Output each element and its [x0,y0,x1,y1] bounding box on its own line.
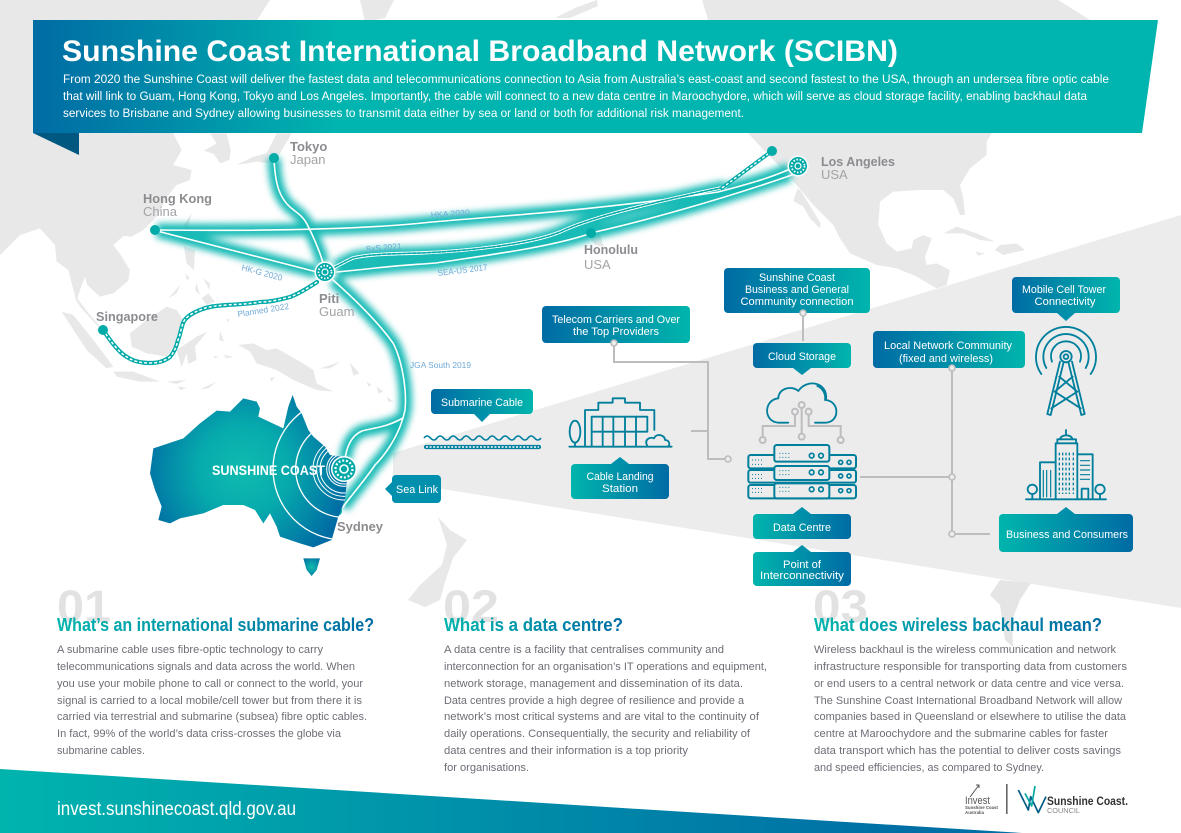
body text: Wireless backhaul is the wireless communication and network [814,644,1116,656]
city labels: USA [821,167,848,182]
banner panel [33,20,1158,133]
cable labels: Planned 2022 [237,301,290,319]
signal arcs [272,412,347,540]
callout: Sea Link [385,475,441,503]
intro paragraph: that will link to Guam, Hong Kong, Tokyo and Los Angeles. Importantly, the cable will connect to a new data centre in Maroochydore, which will serve as cloud storage facility, enabling backhaul data [63,89,1087,103]
callout: Business and Consumers [999,507,1133,552]
icon: submarine cable waves [424,436,541,447]
city labels: Sydney [337,519,384,534]
logo: Sunshine Coast Council: COUNCIL [1047,806,1080,815]
icon: server stack [748,445,856,498]
callout: Point of Interconnectivity [753,545,851,586]
callout: Submarine Cable: Submarine Cable [441,397,523,409]
callout: Mobile Cell Tower: Mobile Cell Tower [1022,284,1106,296]
cable labels: HKA 2020 [430,207,470,220]
number 02: 02 [443,581,499,632]
callout: Cloud Storage: Cloud Storage [768,351,836,363]
title: Sunshine Coast International Broadband Network (SCIBN) [62,35,898,68]
city labels [96,139,895,534]
Asia and islands [0,0,393,402]
cable: planned 2022 [103,282,317,363]
callout: Cable Landing Station [571,457,669,499]
callout: Cable Landing Station: Station [602,483,638,495]
body text: or end users to a central network or data centre and vice versa. [814,678,1124,690]
callout: Business and Consumers: Business and Consumers [1006,529,1128,541]
body text [57,644,367,757]
callout: Point of Interconnectivity: Interconnectivity [760,570,845,582]
number 03: 03 [813,581,868,632]
body text: infrastructure responsible for transporting data from customers [814,661,1127,673]
number 01: 01 [57,581,111,632]
body text: centre at Maroochydore and the submarine cables for faster [814,728,1108,740]
body text: companies based in Queensland or elsewhere to utilise the data [814,711,1127,723]
body text: The Sunshine Coast International Broadband Network will allow [814,695,1123,707]
body text: you use your mobile phone to call or connect to the world, your [57,678,363,690]
hub node: Sunshine Coast [331,456,357,482]
body text: daily operations. Consequentially, the security and reliability of [444,728,751,740]
callout: Point of Interconnectivity: Point of [783,559,822,571]
city labels: Los Angeles [821,154,895,169]
intro paragraph: From 2020 the Sunshine Coast will deliver the fastest data and telecommunications connection to Asia from Australia’s east-coast and second fastest to the USA, through an undersea fibre optic cable [63,72,1109,86]
hub node: Los Angeles [788,156,808,176]
callout: Data Centre: Data Centre [773,522,831,534]
city labels: Honolulu [584,242,638,257]
body text: network storage, management and dissemination of its data. [444,678,743,690]
city labels: Tokyo [290,139,327,154]
body text: carried via terrestrial and submarine (subsea) fibre optic cables. [57,711,367,723]
body text [814,644,1127,774]
circuit connectors [760,402,844,443]
callout: Cable Landing Station: Cable Landing [586,471,654,483]
icon: cell tower [1036,327,1096,415]
city labels: Japan [290,152,325,167]
connector: community to cloud storage [802,314,804,341]
intro paragraph: services to Brisbane and Sydney allowing businesses to transmit data either by sea or land or both for additional risk management. [63,106,744,120]
North America [702,0,1090,288]
icon: cloud [760,383,844,443]
Australia map [150,395,357,576]
cable labels [237,207,488,370]
city labels: China [143,204,178,219]
callout: Sunshine Coast community connection: Sunshine Coast [759,272,835,284]
section 02 [443,581,767,774]
heading: What does wireless backhaul mean? [814,615,1102,635]
header banner [33,20,1158,155]
cable: Sunshine Coast branch [345,418,403,460]
connector: data centre to local network and business [860,370,990,537]
icon: cable landing station [569,398,672,447]
city labels: USA [584,257,611,272]
intro paragraph [63,72,1109,120]
cable: JGA South 2019 [333,280,405,507]
hub node: Guam [314,262,336,282]
footer band [0,769,1022,833]
banner fold [33,133,79,155]
world map background [0,0,1090,607]
body text: data transport which has the potential to deliver costs savings [814,745,1121,757]
callout: Local Network Community [873,331,1025,371]
body text: for organisations. [444,762,529,774]
cable: HK-G 2020 [157,231,317,272]
city labels: Hong Kong [143,191,212,206]
callout: Sunshine Coast community connection [724,268,870,316]
South America tip [990,580,1031,647]
heading: What is a data centre? [444,615,623,635]
callout: Data Centre [753,507,851,539]
cable: HKA 2020 [157,169,790,230]
city labels: Guam [319,304,354,319]
callout: Local Network Community: (fixed and wireless) [899,353,993,365]
connector: telecom carriers to data centre [611,340,731,462]
Tasmania [303,558,320,576]
callout: Sunshine Coast community connection: Business and General [745,284,849,296]
city labels: Singapore [96,309,158,324]
icon: city buildings [1026,430,1106,499]
callout: Local Network Community: Local Network Community [884,340,1012,352]
cable labels: SxS 2021 [365,241,402,254]
cable: SxS 2021 [335,151,772,267]
body text: In fact, 99% of the world’s data criss-crosses the globe via [57,728,342,740]
logo: Invest Sunshine Coast Australia: Australia [965,810,984,815]
logo: Sunshine Coast Council: Sunshine Coast. [1047,796,1128,808]
section 01 [57,581,374,757]
body text: data centres and their information is a top priority [444,745,688,757]
cable labels: JGA South 2019 [410,360,471,370]
callout: Sea Link: Sea Link [396,484,438,496]
callout: Mobile Cell Tower [1012,277,1120,321]
cable labels: HK-G 2020 [240,262,284,283]
body text: signal is carried to a local mobile/cell tower but from there it is [57,695,362,707]
grey network band [393,215,1181,608]
callout: Sunshine Coast community connection: Community connection [740,296,854,308]
cable: SEA-US 2017 [337,175,792,272]
cable: Tokyo to Guam [274,158,323,263]
Australia landmass [150,395,348,547]
body text [444,644,767,774]
body text: interconnection for an organisation’s IT operations and equipment, [444,661,767,673]
callout: Telecom Carriers: the Top Providers [573,326,659,338]
heading: What’s an international submarine cable? [57,615,374,635]
callout: Mobile Cell Tower: Connectivity [1034,296,1096,308]
callout: Telecom Carriers: Telecom Carriers and Over [552,314,680,326]
label: Sunshine Coast: SUNSHINE COAST [212,463,326,478]
body text: network’s most critical systems and are vital to the continuity of [444,711,760,723]
body text: A data centre is a facility that centralises community and [444,644,724,656]
logo: Invest Sunshine Coast Australia: Invest [965,795,990,807]
logo: Sunshine Coast Council [1018,786,1128,815]
section 03 [813,581,1127,774]
body text: telecommunications signals and data across the world. When [57,661,355,673]
callout: Telecom Carriers [542,306,690,346]
city nodes [98,146,777,516]
body text: A submarine cable uses fibre-optic technology to carry [57,644,323,656]
cable labels: SEA-US 2017 [437,262,488,278]
logo: Invest Sunshine Coast Australia: Sunshine Coast [965,805,998,810]
cable lines [103,151,792,507]
callout: Submarine Cable [431,389,533,422]
website url: invest.sunshinecoast.qld.gov.au [57,799,296,820]
city labels: Piti [319,291,339,306]
body text: submarine cables. [57,745,145,757]
submarine cable glow [157,158,790,507]
body text: Data centres provide a high degree of resilience and provide a [444,695,745,707]
body text: and speed efficiencies, as compared to Sydney. [814,762,1044,774]
logo: Invest Sunshine Coast Australia [965,785,998,815]
logo divider [1006,784,1008,814]
callout: Cloud Storage [753,343,851,375]
